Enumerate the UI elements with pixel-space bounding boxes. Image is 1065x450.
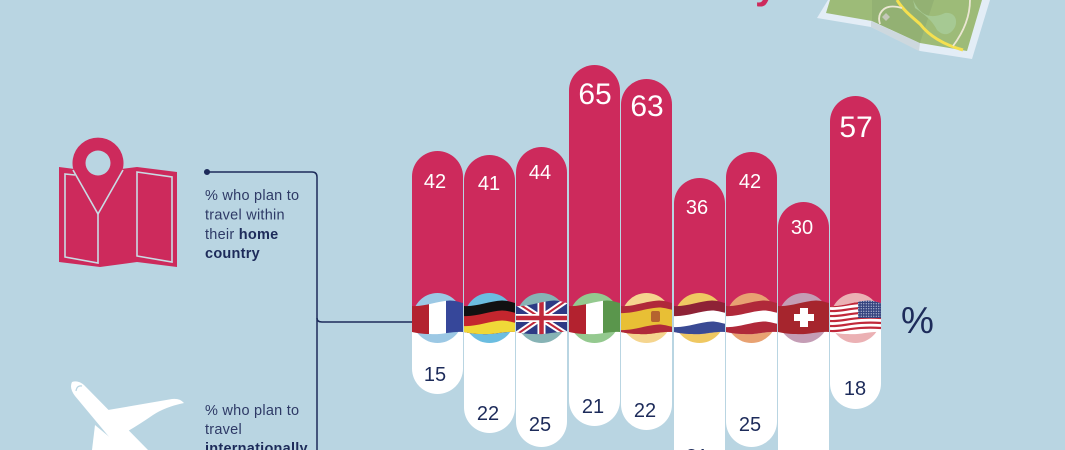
values: international: 22 bbox=[634, 400, 656, 422]
values: home country: 44 bbox=[529, 162, 551, 184]
values: home country: 57 bbox=[839, 111, 873, 144]
flag: Netherlands bbox=[674, 300, 725, 334]
label: home country: their home bbox=[205, 227, 278, 243]
flag: France bbox=[412, 300, 463, 334]
values: home country: 42 bbox=[739, 171, 761, 193]
label: international bbox=[205, 403, 308, 450]
values: home country: 42 bbox=[424, 171, 446, 193]
values: home country: 41 bbox=[478, 173, 500, 195]
flag: Austria bbox=[726, 300, 777, 334]
icon: map with location pin bbox=[59, 138, 177, 267]
label: home country: % who plan to bbox=[205, 188, 299, 204]
values: international: 25 bbox=[739, 414, 761, 436]
values: home country bbox=[424, 78, 873, 239]
values: home country: 36 bbox=[686, 197, 708, 219]
label: home country: travel within bbox=[205, 208, 285, 224]
values: international: 18 bbox=[844, 378, 866, 400]
flag: United Kingdom bbox=[516, 300, 567, 334]
flag: Spain bbox=[621, 300, 672, 334]
values: international: 15 bbox=[424, 364, 446, 386]
values: international: 25 bbox=[529, 414, 551, 436]
label: international: % who plan to bbox=[205, 403, 299, 419]
bars: international travel (white) bbox=[412, 318, 881, 450]
unit: percent sign: % bbox=[901, 300, 934, 341]
icon: folded park map bbox=[817, 0, 990, 59]
label: home country bbox=[205, 188, 299, 262]
icon: airplane bbox=[71, 381, 184, 450]
label: home country: country bbox=[205, 246, 260, 262]
flag: Switzerland bbox=[778, 300, 829, 334]
values: international: 21 bbox=[582, 396, 604, 418]
flag backdrop circles bbox=[412, 293, 880, 343]
values: home country: 63 bbox=[630, 90, 664, 123]
values: international: 22 bbox=[477, 403, 499, 425]
flag: United States bbox=[830, 300, 881, 334]
connector lines from labels to chart bbox=[205, 170, 412, 450]
values: home country: 65 bbox=[578, 78, 612, 111]
flag: Italy bbox=[569, 300, 620, 334]
values: international bbox=[424, 364, 866, 450]
label: international: travel bbox=[205, 422, 242, 438]
values: home country: 30 bbox=[791, 217, 813, 239]
flag: Germany bbox=[464, 300, 515, 334]
bars: home country travel (red) bbox=[412, 65, 881, 318]
